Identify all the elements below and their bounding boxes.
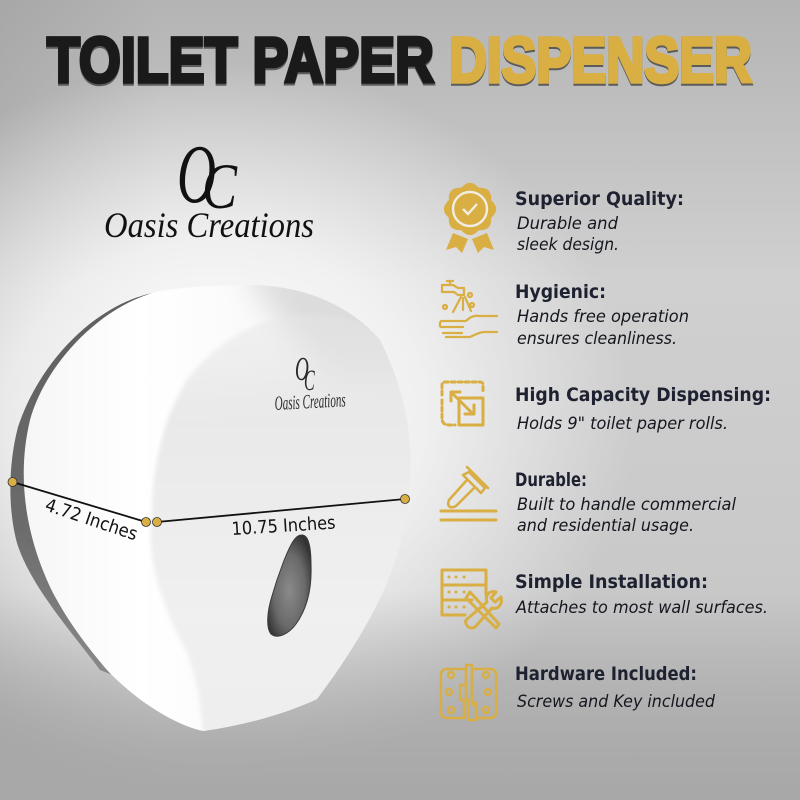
dimension: depth: 4.72 Inches (42, 495, 140, 545)
feature: high capacity (442, 382, 771, 433)
text: high capacity (515, 384, 771, 433)
icon: door hinge (441, 665, 496, 720)
dispensing window (268, 535, 311, 636)
text: hygienic: ensures cleanliness. (517, 329, 677, 348)
text: high capacity: Holds 9" toilet paper rolls. (517, 414, 728, 433)
text: simple installation: Simple Installation: (515, 571, 708, 593)
text: superior quality: Superior Quality: (515, 188, 684, 210)
small logo on dispenser (274, 351, 346, 415)
small logo on dispenser: Oasis Creations (274, 388, 346, 415)
text: hardware included: Screws and Key included (517, 692, 715, 711)
dimension: depth (8, 478, 150, 545)
text: durable: Durable: (515, 469, 587, 491)
text: durable: Built to handle commercial (517, 495, 736, 514)
icon: gavel (441, 467, 496, 520)
title (47, 24, 752, 96)
dispenser product (10, 285, 404, 731)
dispenser back shell (10, 291, 165, 680)
small logo on dispenser: O (295, 351, 309, 387)
brand logo: Oasis Creations (104, 205, 314, 245)
text: superior quality: sleek design. (517, 235, 619, 254)
dimension: width (152, 494, 410, 540)
feature: simple installation (442, 570, 768, 628)
text: hygienic (515, 281, 689, 348)
dispenser front shell (24, 285, 389, 731)
text: high capacity: High Capacity Dispensing: (515, 384, 771, 406)
feature: superior quality (444, 183, 684, 254)
brand logo (104, 128, 314, 245)
text: hygienic: Hands free operation (517, 307, 689, 326)
text: hygienic: Hygienic: (515, 281, 606, 303)
text: superior quality: Durable and (517, 214, 619, 233)
text: hardware included: Hardware Included: (515, 663, 697, 685)
feature: durable (441, 467, 736, 535)
brand logo: O (177, 128, 216, 221)
text: simple installation (515, 571, 768, 617)
text: durable (515, 469, 736, 535)
brand logo: C (202, 150, 238, 222)
feature: hygienic (440, 281, 689, 348)
text: superior quality (515, 188, 684, 254)
dimension: width: 10.75 Inches (231, 513, 336, 540)
feature: hardware included (441, 663, 715, 720)
dispenser front panel (151, 314, 420, 740)
icon: server rack with tools (442, 570, 501, 628)
icon: washing hand under tap (440, 281, 497, 337)
icon: award badge (444, 183, 496, 253)
text: durable: and residential usage. (517, 516, 694, 535)
small logo on dispenser: C (304, 365, 315, 397)
title: TOILET PAPER (47, 24, 434, 96)
icon: expand arrow in dashed square (442, 382, 483, 425)
text: simple installation: Attaches to most wall surfaces. (515, 598, 768, 617)
text: hardware included (515, 663, 715, 711)
